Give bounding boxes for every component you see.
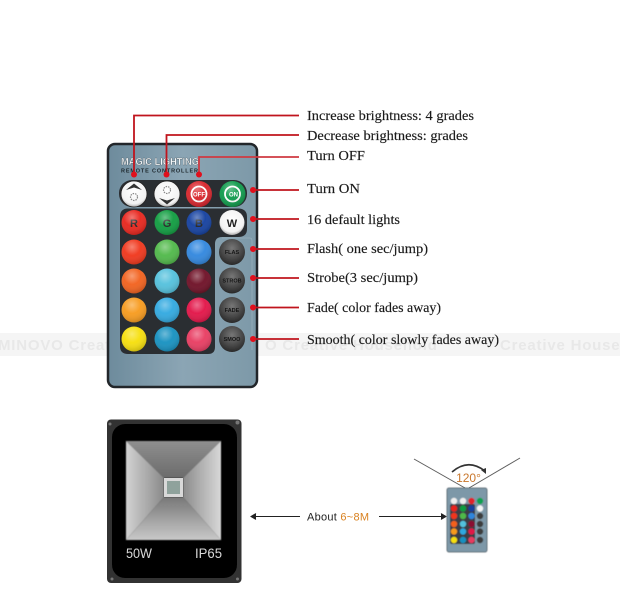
IP rating label: IP65 [195,546,222,561]
mode buttons: SMOO [224,337,241,343]
callout labels: Fade( color fades away) [307,301,441,316]
remote title [121,156,199,174]
viewing angle lines [414,458,520,488]
off button [186,181,212,207]
callout labels: Turn OFF [307,149,365,164]
angle arc arrow [452,465,486,474]
callout labels [307,109,499,348]
LED chip [164,478,183,497]
mode buttons [219,239,245,352]
small remote control [447,488,487,552]
RGBW buttons: G [163,218,171,230]
remote body [108,144,257,387]
watermark band: MINOVO Creative Household [0,337,224,354]
left distance arrow [251,514,300,520]
watermark band: O Creative Household [265,337,438,354]
brightness up button [121,181,147,207]
callout labels: Smooth( color slowly fades away) [307,333,499,348]
floodlight [107,420,242,583]
brightness down button [154,181,180,207]
small remote panel [450,504,475,544]
on button [220,181,246,207]
red callout dots [131,172,256,342]
callout labels: Strobe(3 sec/jump) [307,271,418,286]
small remote buttons [451,498,483,543]
callout labels: Decrease brightness: grades [307,129,468,144]
mode button surround [222,238,252,350]
watermark band [0,333,620,356]
remote title: MAGIC LIGHTING [121,156,199,168]
distance label: About 6~8M [307,512,369,524]
button gloss [122,181,246,352]
large remote control [108,144,257,387]
mode buttons: FADE [225,308,240,314]
callout labels: Increase brightness: 4 grades [307,109,474,124]
remote title: REMOTE CONTROLLER [121,168,198,174]
on button: ON [229,192,238,198]
right distance arrow [379,514,446,520]
off button: OFF [193,192,205,198]
mode buttons: STROB [222,278,242,284]
mounting screws [108,420,240,580]
small remote body [447,488,487,552]
callout labels: Flash( one sec/jump) [307,242,428,257]
RGBW buttons: R [130,218,138,230]
red callout lines [134,116,299,339]
RGBW buttons: B [195,218,203,230]
RGBW buttons: W [227,218,238,230]
mode buttons: FLAS [225,250,240,256]
callout labels: 16 default lights [307,213,400,228]
colour buttons [122,240,212,352]
RGBW buttons [122,210,244,235]
button panels [119,180,247,354]
callout labels: Turn ON [307,182,360,197]
wattage label: 50W [126,546,152,561]
floodlight housing [107,420,242,583]
reflector [126,441,221,540]
angle label: 120° [456,471,481,485]
